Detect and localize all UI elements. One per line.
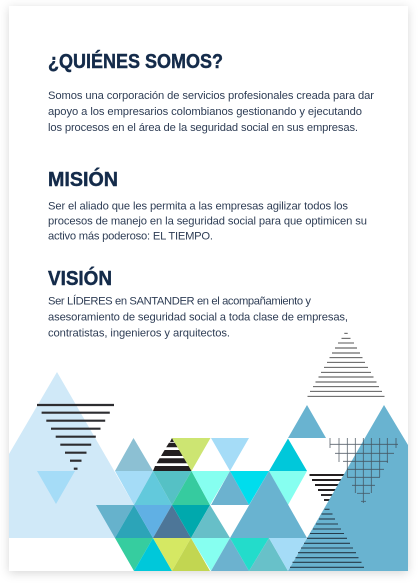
triangle mosaic [96,405,326,571]
text block: vision [48,294,348,340]
text block: vision: Ser LÍDERES en SANTANDER en el acompañamiento y [48,294,311,307]
text block: mision [48,200,367,242]
text block: quienes somos: apoyo a los empresarios colombianos gestionando y ejecutando [48,106,362,118]
icon: upright striped triangle [290,509,364,567]
text block: quienes somos: los procesos en el área de la seguridad social en sus empresas. [48,122,358,134]
heading: mision: MISIÓN [48,167,118,191]
heading: vision: VISIÓN [48,266,112,290]
icon: black striped triangle [153,438,192,471]
icon: inverted striped triangle [37,405,114,469]
icon: hatched grid triangle [330,438,398,503]
text block: vision: asesoramiento de seguridad social a toda clase de empresas, [48,311,348,323]
icon: lime inverted triangle [172,438,210,471]
icon: top striped triangle [308,333,384,396]
text block: quienes somos [48,90,374,134]
text block: mision: activo más poderoso: EL TIEMPO. [48,230,213,242]
heading: quienes somos: ¿QUIÉNES SOMOS? [48,50,223,73]
text block: quienes somos: Somos una corporación de servicios profesionales creada para dar [48,90,374,102]
icon: large teal triangle [288,405,408,571]
text block: vision: contratistas, ingenieros y arquitectos. [48,328,230,340]
icon: large pale blue triangle [9,372,153,538]
icon: small inverted blue triangle [37,471,75,504]
icon: small inverted black striped triangle [310,475,346,500]
text block: mision: Ser el aliado que les permita a las empresas agilizar todos los [48,200,348,212]
text block: mision: procesos de manejo en la seguridad social para que optimicen su [48,216,367,228]
